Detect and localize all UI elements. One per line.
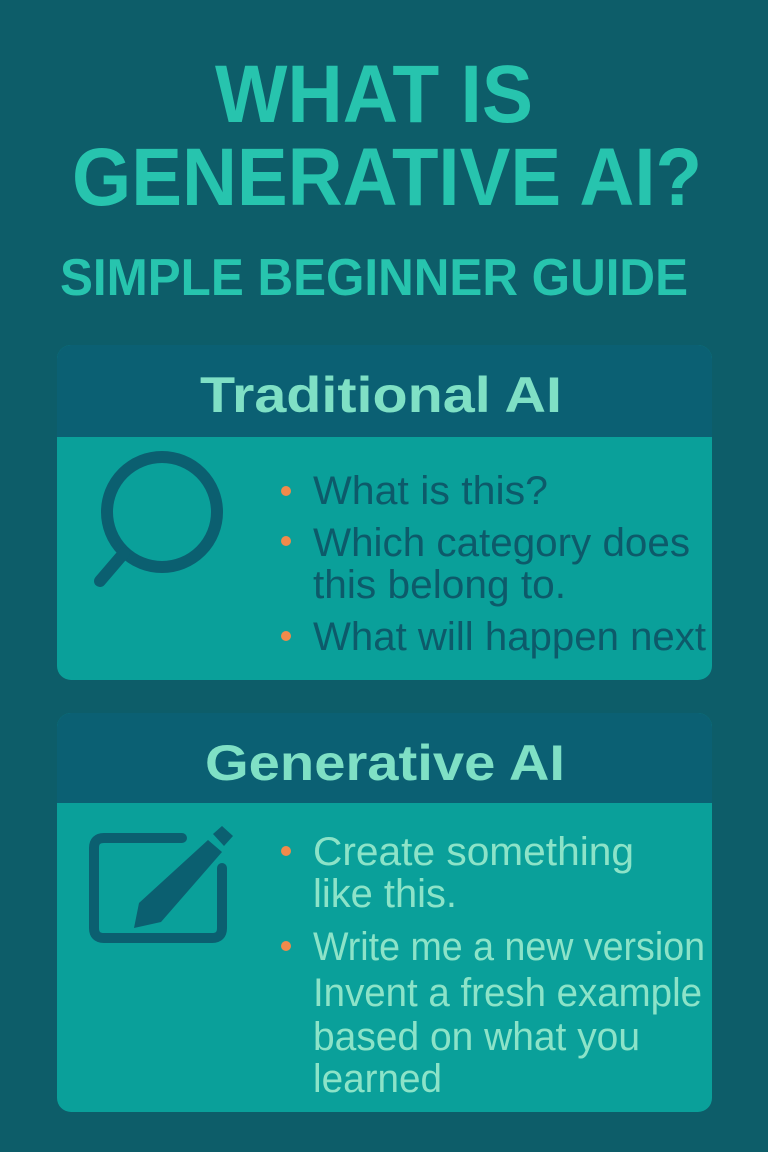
icon: edit pencil [94,826,233,938]
panel: generative AI [57,713,712,1112]
bullet list: generative: based on what you [313,1015,640,1059]
bullet list: generative: Write me a new version [313,925,705,969]
title: WHAT IS [215,49,533,140]
bullet list: generative: like this. [313,872,457,916]
bullet list: traditional: Which category does [313,521,690,565]
bullet list: traditional [281,469,706,659]
bullet list: traditional: What is this? [313,469,548,513]
icon: magnifying glass [100,457,217,581]
subtitle: SIMPLE BEGINNER GUIDE [60,249,688,307]
title: GENERATIVE AI? [72,132,702,223]
title [72,49,702,223]
heading: Traditional AI: Traditional AI [200,367,562,423]
bullet list: traditional: What will happen next [313,615,706,659]
bullet list: generative: Create something [313,830,634,874]
panel: traditional AI [57,345,712,680]
bullet list: generative [281,830,705,1101]
bullet list: generative: Invent a fresh example [313,971,702,1015]
bullet list: traditional: this belong to. [313,563,566,607]
heading: Generative AI: Generative AI [205,735,565,791]
bullet list: generative: learned [313,1057,442,1101]
